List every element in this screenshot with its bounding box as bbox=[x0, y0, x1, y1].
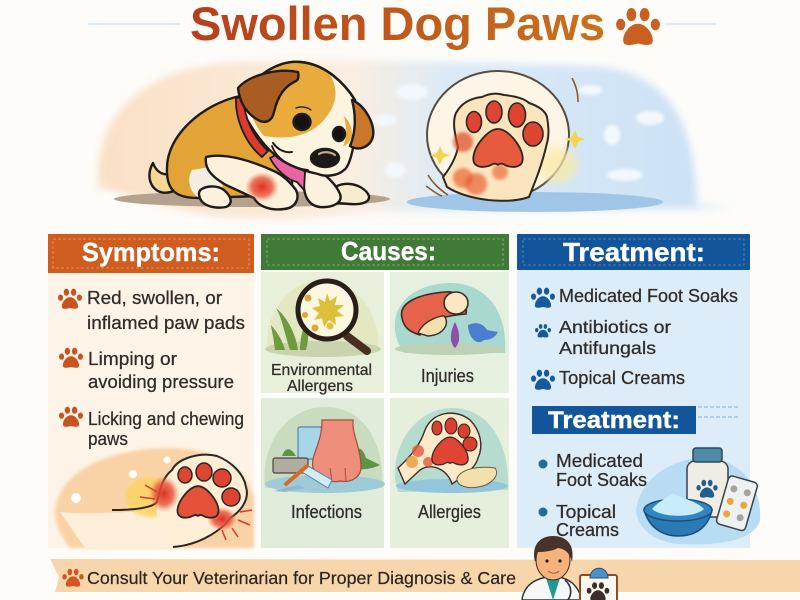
cause: environmental allergens: Allergens bbox=[287, 378, 353, 395]
medicine illustration bbox=[636, 448, 760, 544]
symptoms header bbox=[48, 234, 254, 273]
treatment list: Medicated Foot Soaks bbox=[559, 286, 738, 306]
symptom list: avoiding pressure bbox=[88, 372, 234, 392]
treatment sub-header: Treatment: bbox=[548, 407, 680, 434]
paw close-up bbox=[426, 71, 585, 201]
symptom list bbox=[58, 288, 245, 449]
cause: injuries: Injuries bbox=[421, 366, 474, 386]
treatment header bbox=[517, 234, 750, 270]
cause: allergies: Allergies bbox=[418, 502, 481, 522]
consult banner bbox=[50, 559, 800, 592]
symptom list: paws bbox=[88, 429, 128, 449]
blister pack bbox=[716, 475, 758, 531]
treatment header: Treatment: bbox=[563, 237, 705, 267]
icon: title paw bbox=[616, 8, 660, 45]
veterinarian character bbox=[522, 536, 617, 600]
clipboard bbox=[580, 568, 617, 600]
bottle bbox=[687, 448, 728, 517]
treatment secondary list: Creams bbox=[556, 520, 619, 540]
banner text: Consult Your Veterinarian for Proper Diagnosis & Care bbox=[87, 568, 516, 588]
symptom list: Limping or bbox=[88, 349, 177, 369]
cause: infections: Infections bbox=[291, 502, 362, 522]
treatment secondary list bbox=[538, 451, 647, 540]
hero illustration bbox=[95, 61, 735, 219]
symptom list: inflamed paw pads bbox=[87, 313, 245, 333]
dog bbox=[149, 62, 373, 209]
cause: environmental allergens: Environmental bbox=[271, 362, 372, 379]
symptoms paw illustration bbox=[55, 448, 254, 548]
icon: banner paw bbox=[62, 569, 84, 587]
cream bowl bbox=[644, 493, 712, 536]
hero watercolor background bbox=[95, 61, 735, 219]
treatment secondary list: Foot Soaks bbox=[556, 470, 647, 490]
treatment secondary list: Medicated bbox=[556, 451, 643, 471]
symptoms header: Symptoms: bbox=[82, 237, 220, 267]
causes header: Causes: bbox=[341, 236, 436, 266]
cause: infections bbox=[261, 398, 385, 548]
symptom list: Red, swollen, or bbox=[87, 288, 222, 308]
panel: treatment bbox=[517, 234, 760, 548]
cause: injuries bbox=[390, 272, 509, 393]
treatment sub-header bbox=[532, 406, 738, 434]
treatment list bbox=[531, 286, 738, 390]
cause: environmental allergens bbox=[261, 272, 384, 395]
treatment secondary list: Topical bbox=[556, 502, 616, 522]
treatment list: Topical Creams bbox=[559, 368, 685, 388]
symptom list: Licking and chewing bbox=[88, 409, 244, 429]
treatment list: Antibiotics or bbox=[559, 317, 671, 337]
panel: causes bbox=[261, 234, 509, 548]
paw ground shadow bbox=[407, 192, 663, 212]
panel: symptoms bbox=[48, 234, 254, 548]
dog ground shadow bbox=[114, 191, 390, 207]
causes header bbox=[261, 234, 509, 270]
cause: allergies bbox=[390, 398, 509, 548]
treatment list: Antifungals bbox=[559, 338, 656, 358]
